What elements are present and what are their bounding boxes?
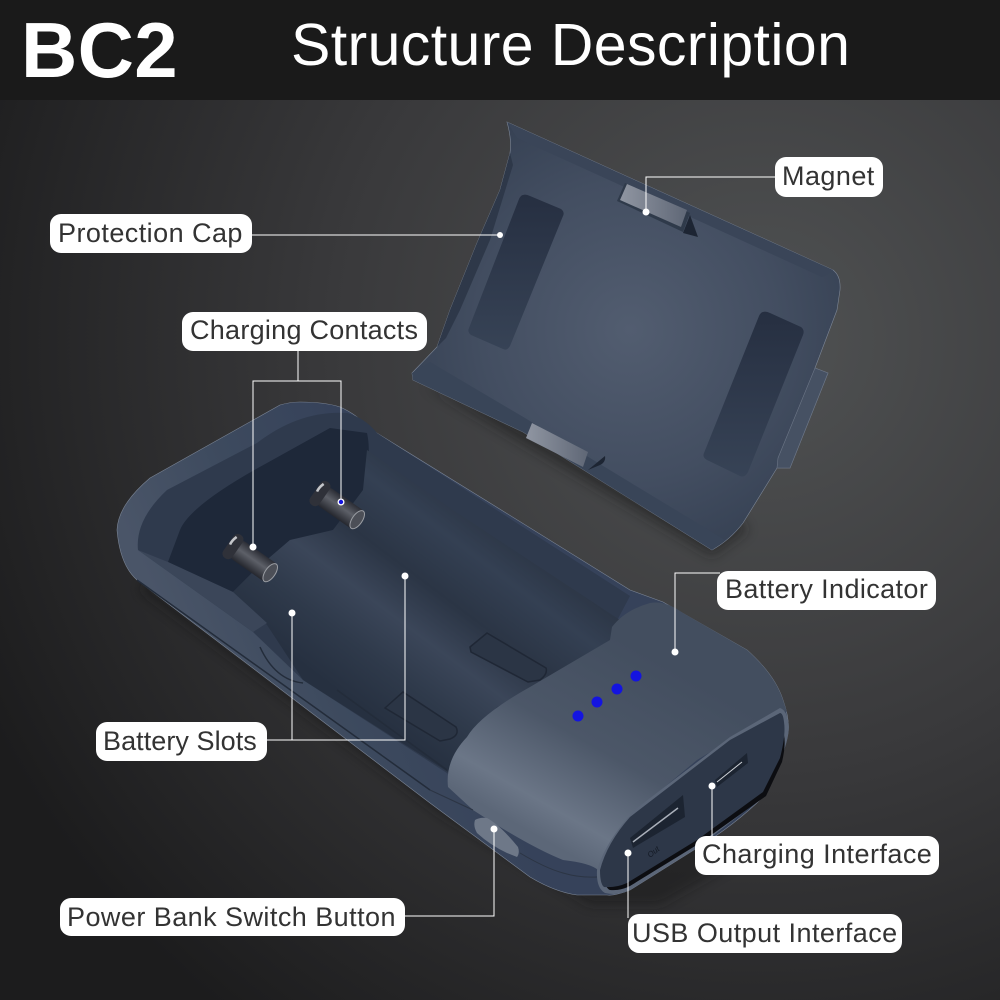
label: protection cap: Protection Cap: [58, 218, 243, 248]
label: magnet: [775, 157, 883, 197]
battery slots floor: [233, 450, 620, 772]
contact pin rear: [307, 479, 369, 534]
rim ledge: [138, 550, 267, 632]
usb port: [630, 795, 685, 860]
title: Structure Description: [291, 12, 850, 78]
label: usb output interface: USB Output Interface: [632, 918, 898, 948]
end panel: [597, 708, 789, 894]
slot marker right: [470, 633, 546, 682]
magnet bottom: [526, 423, 605, 470]
label: charging interface: Charging Interface: [702, 839, 932, 869]
slot marker left: [385, 692, 457, 741]
product name: BC2: [21, 6, 178, 94]
battery indicator leds: [572, 670, 642, 722]
lower side seam: [430, 790, 597, 877]
label: power bank switch button: Power Bank Switch Button: [67, 902, 396, 932]
label: battery slots: Battery Slots: [103, 726, 257, 756]
label: battery slots: [96, 722, 267, 761]
leader lines: [250, 177, 775, 918]
power bank body: [117, 402, 789, 905]
side seams: [137, 580, 447, 790]
protection cap: [412, 122, 840, 556]
inner recess: [138, 413, 630, 775]
header bar: [0, 0, 1000, 100]
charging port: [715, 753, 748, 787]
label: charging contacts: Charging Contacts: [190, 315, 418, 345]
usb port: Out: [646, 844, 662, 860]
cap side clip: [777, 368, 828, 468]
top shell: [448, 602, 787, 870]
leader dots: [250, 208, 716, 856]
label: battery indicator: Battery Indicator: [725, 574, 928, 604]
magnet top: [617, 183, 698, 237]
cavity behind contacts: [168, 428, 369, 592]
power switch: [474, 818, 519, 857]
label: magnet: Magnet: [782, 161, 875, 191]
contact pin front: [220, 532, 282, 587]
cap recess right: [703, 312, 804, 476]
cap recess left: [468, 195, 564, 350]
cap lower wall: [412, 362, 725, 550]
